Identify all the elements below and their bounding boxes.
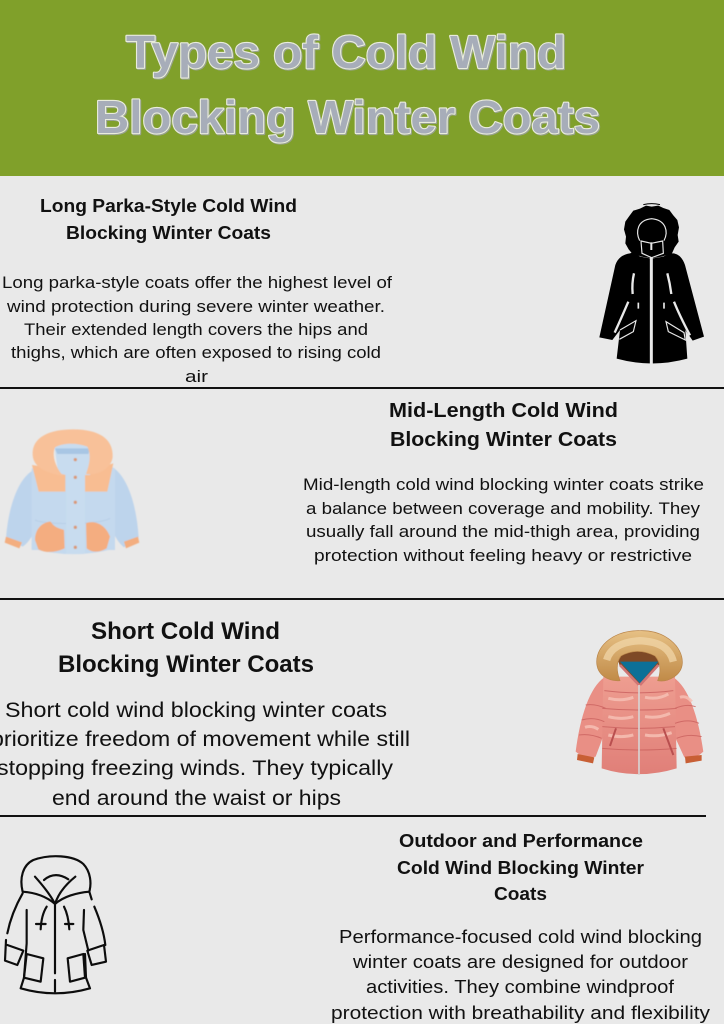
text: long parka description: thighs, which are often exposed to rising cold [11,343,381,362]
heading: long parka: Long Parka-Style Cold Wind [40,195,297,216]
heading: mid-length: Mid-Length Cold Wind [389,399,618,422]
title: Blocking Winter Coats [95,91,600,143]
panel: long parka [2,195,704,386]
divider [0,815,706,817]
heading: outdoor and performance [397,830,644,904]
text: outdoor and performance description: activities. They combine windproof [366,977,675,997]
text: long parka description: wind protection during severe winter weather. [6,297,385,316]
heading: short: Blocking Winter Coats [58,651,314,678]
heading: mid-length [389,399,618,451]
text: outdoor and performance description [331,927,710,1023]
text: mid-length description [303,475,704,565]
heading: short [58,618,314,678]
heading: short: Short Cold Wind [91,618,280,645]
panel: outdoor and performance [5,830,710,1023]
heading: mid-length: Blocking Winter Coats [390,428,617,451]
panel: short [0,618,703,810]
heading: long parka [40,195,297,243]
text: short description: stopping freezing winds. They typically [0,756,393,780]
panel: mid-length [5,399,704,565]
heading: long parka: Blocking Winter Coats [66,222,271,243]
icon: black parka coat [599,204,704,364]
text: short description [0,698,410,810]
divider [0,387,724,389]
text: mid-length description: protection without feeling heavy or restrictive [314,546,692,565]
icon: blue and peach puffer coat [5,429,139,554]
heading: outdoor and performance: Cold Wind Blocking Winter [397,857,644,878]
text: long parka description: air [185,367,208,386]
title: Types of Cold Wind [126,26,566,78]
text: mid-length description: Mid-length cold wind blocking winter coats strike [303,475,704,494]
title [95,26,600,143]
heading: outdoor and performance: Outdoor and Performance [399,830,643,851]
text: long parka description [2,273,392,386]
heading: outdoor and performance: Coats [494,883,547,904]
text: mid-length description: a balance between coverage and mobility. They [306,499,701,518]
text: short description: Short cold wind blocking winter coats [5,698,387,722]
divider [0,598,724,600]
text: long parka description: Their extended length covers the hips and [24,320,368,339]
text: outdoor and performance description: protection with breathability and flexibility [331,1003,710,1023]
icon: pink puffer coat [576,631,703,775]
text: short description: end around the waist or hips [52,786,341,810]
icon: outline coat [5,856,106,993]
text: long parka description: Long parka-style coats offer the highest level of [2,273,392,292]
text: mid-length description: usually fall around the mid-thigh area, providing [306,522,700,541]
text: short description: prioritize freedom of movement while still [0,727,410,751]
text: outdoor and performance description: Performance-focused cold wind blocking [339,927,702,947]
text: outdoor and performance description: winter coats are designed for outdoor [352,952,688,972]
title banner [0,0,724,176]
